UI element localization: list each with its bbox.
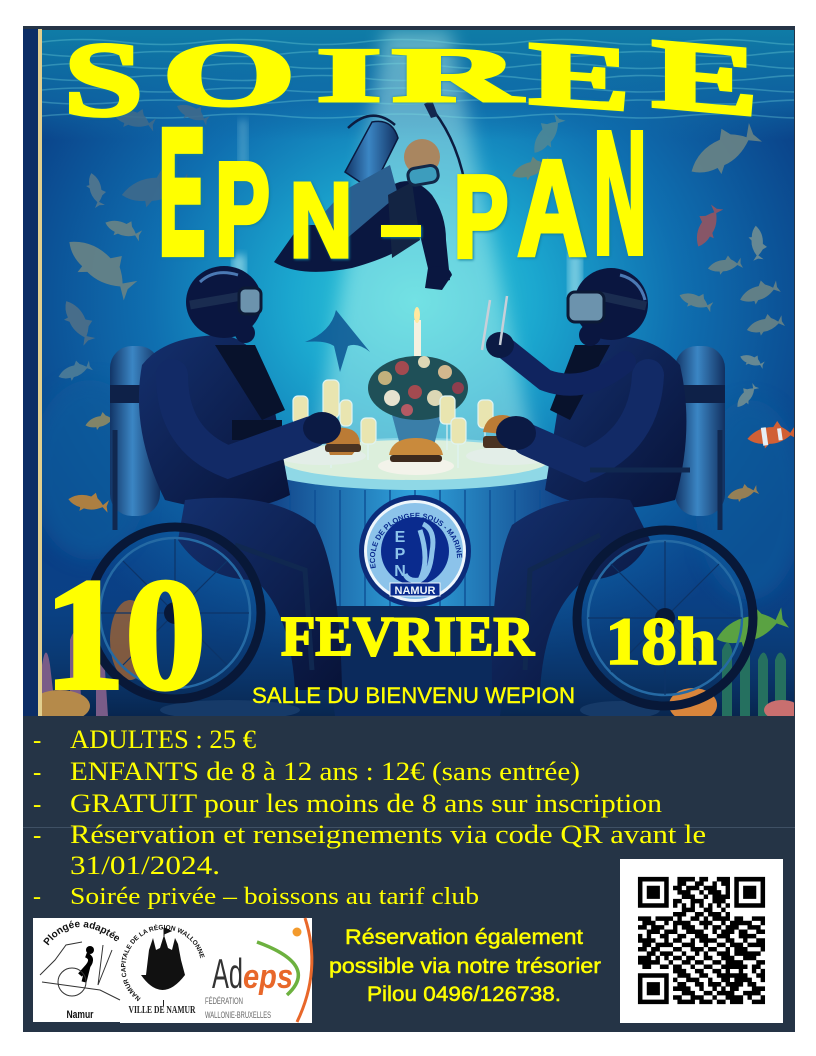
fish school <box>55 97 799 656</box>
surface waves <box>42 40 816 118</box>
EPN Namur club emblem: E <box>395 529 406 546</box>
reservation note <box>329 926 601 1006</box>
title: EPN - PAN: P <box>215 135 270 283</box>
left seated diver <box>89 266 342 699</box>
table <box>255 307 575 716</box>
fork hand <box>482 296 514 358</box>
hand <box>496 416 536 450</box>
logo: Adeps <box>205 918 312 1022</box>
tank <box>675 346 725 516</box>
bubbles <box>232 120 582 315</box>
vase <box>392 415 440 442</box>
candle <box>414 320 421 356</box>
wheelchair <box>525 430 753 706</box>
date: 10: 10 <box>44 545 206 723</box>
EPN Namur club emblem: NAMUR <box>395 585 436 597</box>
logo: Adeps: Ad <box>212 950 243 997</box>
title: SOIREE: E <box>652 19 758 137</box>
info list: - <box>33 791 41 818</box>
info list: - <box>33 884 41 910</box>
plates and burgers <box>278 415 554 475</box>
title: SOIREE: E <box>529 24 630 130</box>
corals <box>30 600 800 722</box>
mask <box>239 288 261 314</box>
wheelchair <box>89 430 312 699</box>
venue: SALLE DU BIENVENU WEPION <box>252 683 575 708</box>
logo: Plongée adaptée Namur <box>40 920 120 1021</box>
manta silhouette <box>305 310 370 372</box>
right seated diver <box>482 268 753 706</box>
EPN Namur club emblem: N <box>394 563 406 580</box>
hand <box>303 412 341 444</box>
info list: - <box>33 822 41 849</box>
EPN Namur club emblem: P <box>395 546 406 563</box>
title: SOIREE: I <box>316 33 382 118</box>
info list: 31/01/2024. <box>70 851 220 880</box>
info list: GRATUIT pour les moins de 8 ans sur inscription <box>70 789 662 818</box>
green fish <box>716 608 789 648</box>
title: EPN - PAN <box>158 92 646 292</box>
info list: ENFANTS de 8 à 12 ans : 12€ (sans entrée) <box>70 757 580 786</box>
title: EPN - PAN: N <box>594 96 647 289</box>
QR code <box>620 859 783 1023</box>
logo: Ville de Namur: NAMUR CAPITALE DE LA RÉGION WALLONNE <box>120 924 205 1002</box>
info list <box>23 725 795 910</box>
title: SOIREE <box>64 19 758 139</box>
mask <box>568 292 604 322</box>
info list: Réservation et renseignements via code QR avant le <box>70 820 706 849</box>
title: EPN - PAN: A <box>518 133 586 284</box>
tank <box>110 346 160 516</box>
reservation note: Réservation également <box>345 926 583 949</box>
logo: Ville de Namur: VILLE DE NAMUR <box>128 1005 196 1016</box>
title: EPN - PAN: E <box>158 92 206 292</box>
time: 18h: 18h <box>605 603 717 679</box>
title: EPN - PAN: P <box>454 152 508 281</box>
title: SOIREE: S <box>64 22 143 139</box>
top diver <box>274 100 470 290</box>
title: EPN - PAN: N <box>290 161 353 279</box>
reservation note: Pilou 0496/126738. <box>367 983 561 1006</box>
glasses <box>293 380 493 468</box>
logo: Adeps: WALLONIE-BRUXELLES <box>205 1010 271 1020</box>
title: SOIREE: O <box>162 26 296 125</box>
logo: Adeps: eps <box>243 958 293 996</box>
title: SOIREE: R <box>392 33 524 118</box>
info list: ADULTES : 25 € <box>70 725 256 754</box>
date: FEVRIER: FEVRIER <box>281 606 535 668</box>
info list: - <box>33 759 41 786</box>
EPN Namur club emblem <box>359 495 471 607</box>
info list: - <box>33 727 41 754</box>
reservation note: possible via notre trésorier <box>329 955 601 978</box>
clownfish <box>748 421 794 448</box>
illustration: underwater scene <box>42 30 794 716</box>
logo: Plongée adaptée Namur: Plongée adaptée <box>43 920 120 946</box>
partner logos <box>33 918 314 1023</box>
logo: Adeps: FÉDÉRATION <box>205 996 243 1006</box>
flower bouquet <box>368 356 468 420</box>
flame <box>414 307 420 323</box>
reef haze <box>42 419 125 560</box>
EPN Namur club emblem: ECOLE DE PLONGEE SOUS - MARINE <box>370 512 462 568</box>
left frame of the illustration <box>23 29 42 716</box>
helmet <box>574 268 648 340</box>
light beams <box>310 30 540 480</box>
info list: Soirée privée – boissons au tarif club <box>70 884 479 910</box>
logo: Plongée adaptée Namur: Namur <box>66 1009 94 1021</box>
helmet <box>186 266 262 338</box>
